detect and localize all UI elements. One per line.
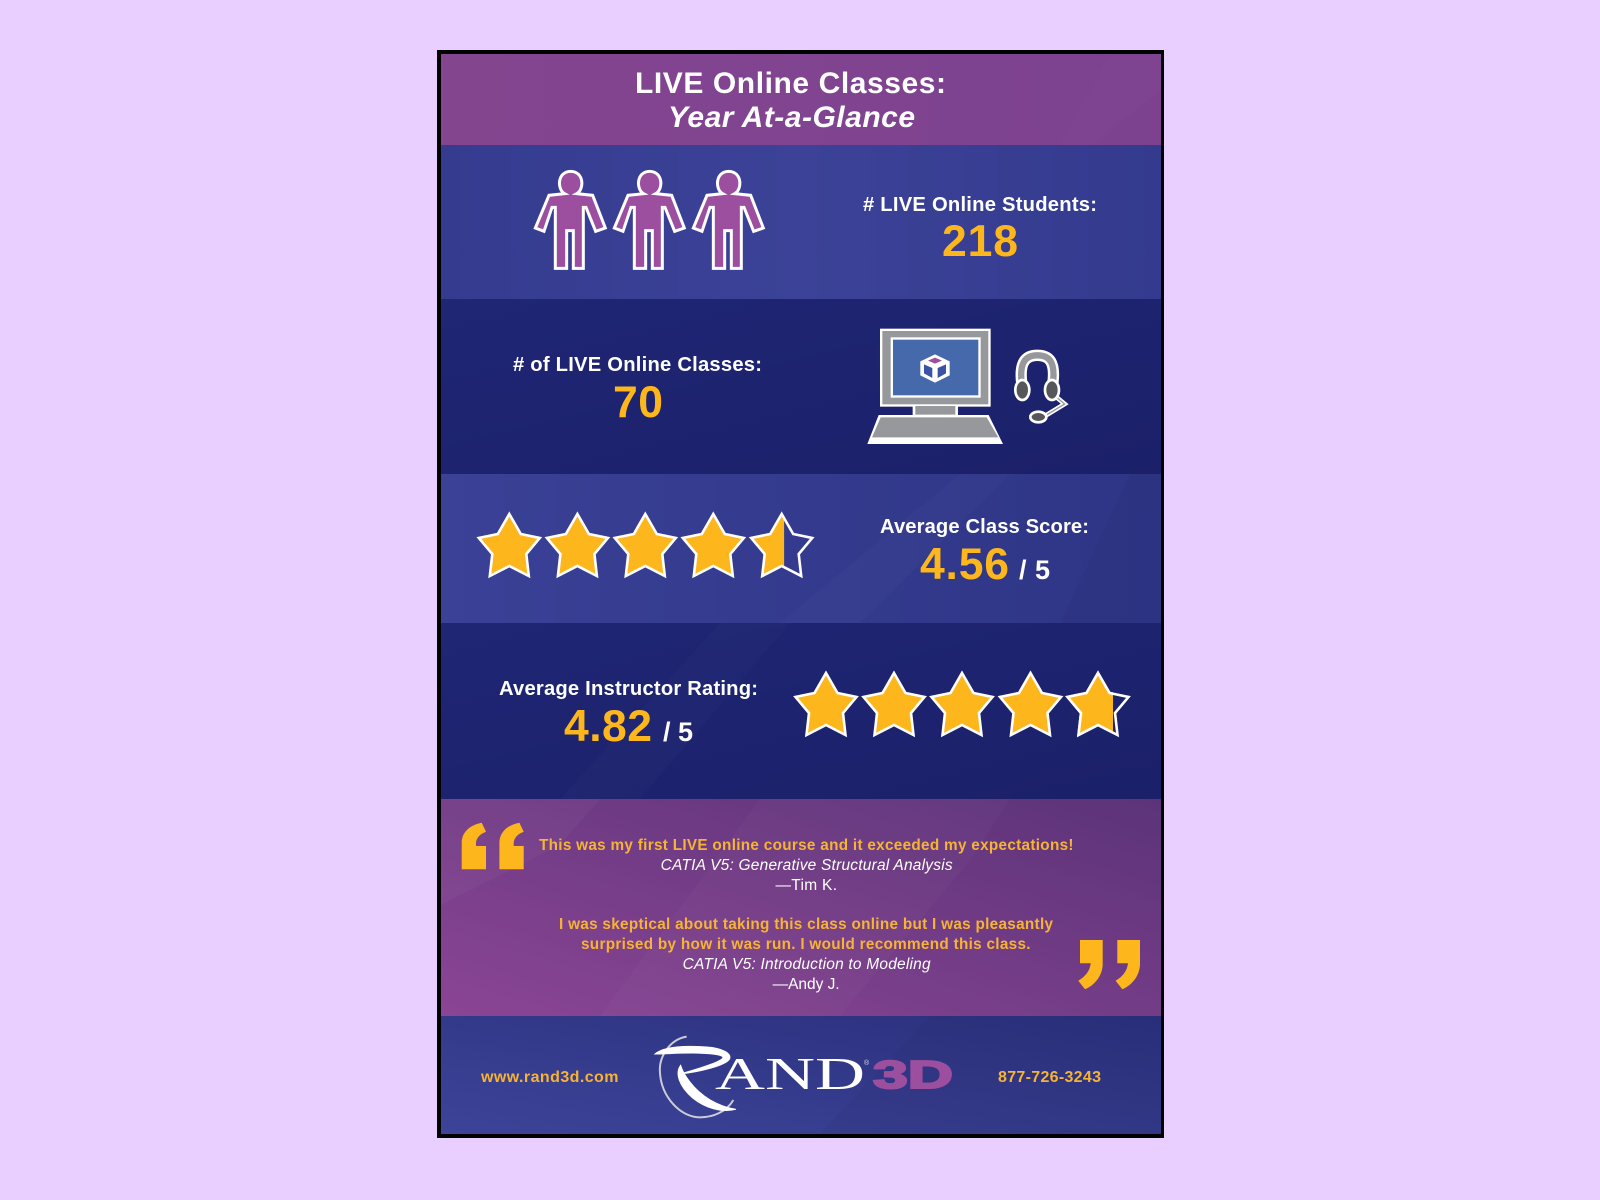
label: instructor rating: Average Instructor Rating:: [499, 678, 758, 700]
logo registered mark: ®: [864, 1059, 870, 1067]
panel: instructor rating: [441, 623, 1161, 799]
quote 1 text: This was my first LIVE online course and it exceeded my expectations!: [539, 837, 1074, 854]
panel: title: [441, 54, 1161, 145]
quote 1 course: CATIA V5: Generative Structural Analysis: [661, 857, 953, 874]
icon: closing quote: [1078, 940, 1140, 989]
quote 2 course: CATIA V5: Introduction to Modeling: [683, 956, 931, 973]
icon: headset: [1015, 355, 1065, 422]
icon: person 2: [614, 171, 684, 268]
quote 2 text line 2: surprised by how it was run. I would recommend this class.: [581, 936, 1030, 953]
phone: 877-726-3243: [998, 1069, 1101, 1086]
star 4: [683, 514, 744, 576]
panel: testimonials: [441, 799, 1161, 1016]
heading: title line 2: Year At-a-Glance: [668, 101, 915, 134]
icon: opening quote: [462, 823, 524, 869]
star 2: [864, 673, 924, 735]
logo text AND: AND: [715, 1048, 865, 1099]
website: www.rand3d.com: [480, 1069, 618, 1086]
star 2: [547, 514, 608, 576]
panel: students: [441, 145, 1161, 299]
label: classes: # of LIVE Online Classes:: [513, 354, 762, 376]
logo: Rand3D: [655, 1037, 953, 1117]
logo swoosh R: [655, 1037, 736, 1117]
chart: instructor stars: [796, 673, 1128, 735]
quote 1 author: —Tim K.: [776, 877, 837, 894]
star 5 partial: [751, 514, 812, 576]
star 1: [479, 514, 540, 576]
label: class score: Average Class Score:: [880, 516, 1089, 538]
label: students: # LIVE Online Students:: [863, 194, 1097, 216]
quote 2 text line 1: I was skeptical about taking this class online but I was pleasantly: [559, 916, 1053, 933]
chart: class score stars: [479, 514, 812, 576]
panel: footer: [441, 1016, 1161, 1134]
star 3: [932, 673, 992, 735]
frame: [437, 50, 1164, 1138]
icon: person 1: [535, 171, 605, 268]
quote 2 author: —Andy J.: [773, 976, 840, 993]
icon: three people: [535, 171, 763, 268]
logo text 3D: 3D: [873, 1054, 953, 1097]
denominator: class score: / 5: [1019, 555, 1050, 585]
denominator: instructor rating: / 5: [663, 717, 693, 747]
number: class score: 4.56: [920, 540, 1009, 589]
icon: computer: [867, 329, 1003, 444]
star 1: [796, 673, 856, 735]
number: students: 218: [942, 217, 1018, 266]
icon: cube: [920, 354, 950, 383]
number: classes: 70: [613, 378, 663, 427]
star 3: [615, 514, 676, 576]
icon: person 3: [693, 171, 763, 268]
infographic: [437, 50, 1164, 1138]
number: instructor rating: 4.82: [564, 702, 652, 751]
panel: class score: [441, 474, 1161, 623]
star 4: [1000, 673, 1061, 735]
star 5 partial: [1068, 673, 1128, 735]
heading: title line 1: LIVE Online Classes:: [635, 67, 946, 100]
panel: classes: [441, 299, 1161, 474]
